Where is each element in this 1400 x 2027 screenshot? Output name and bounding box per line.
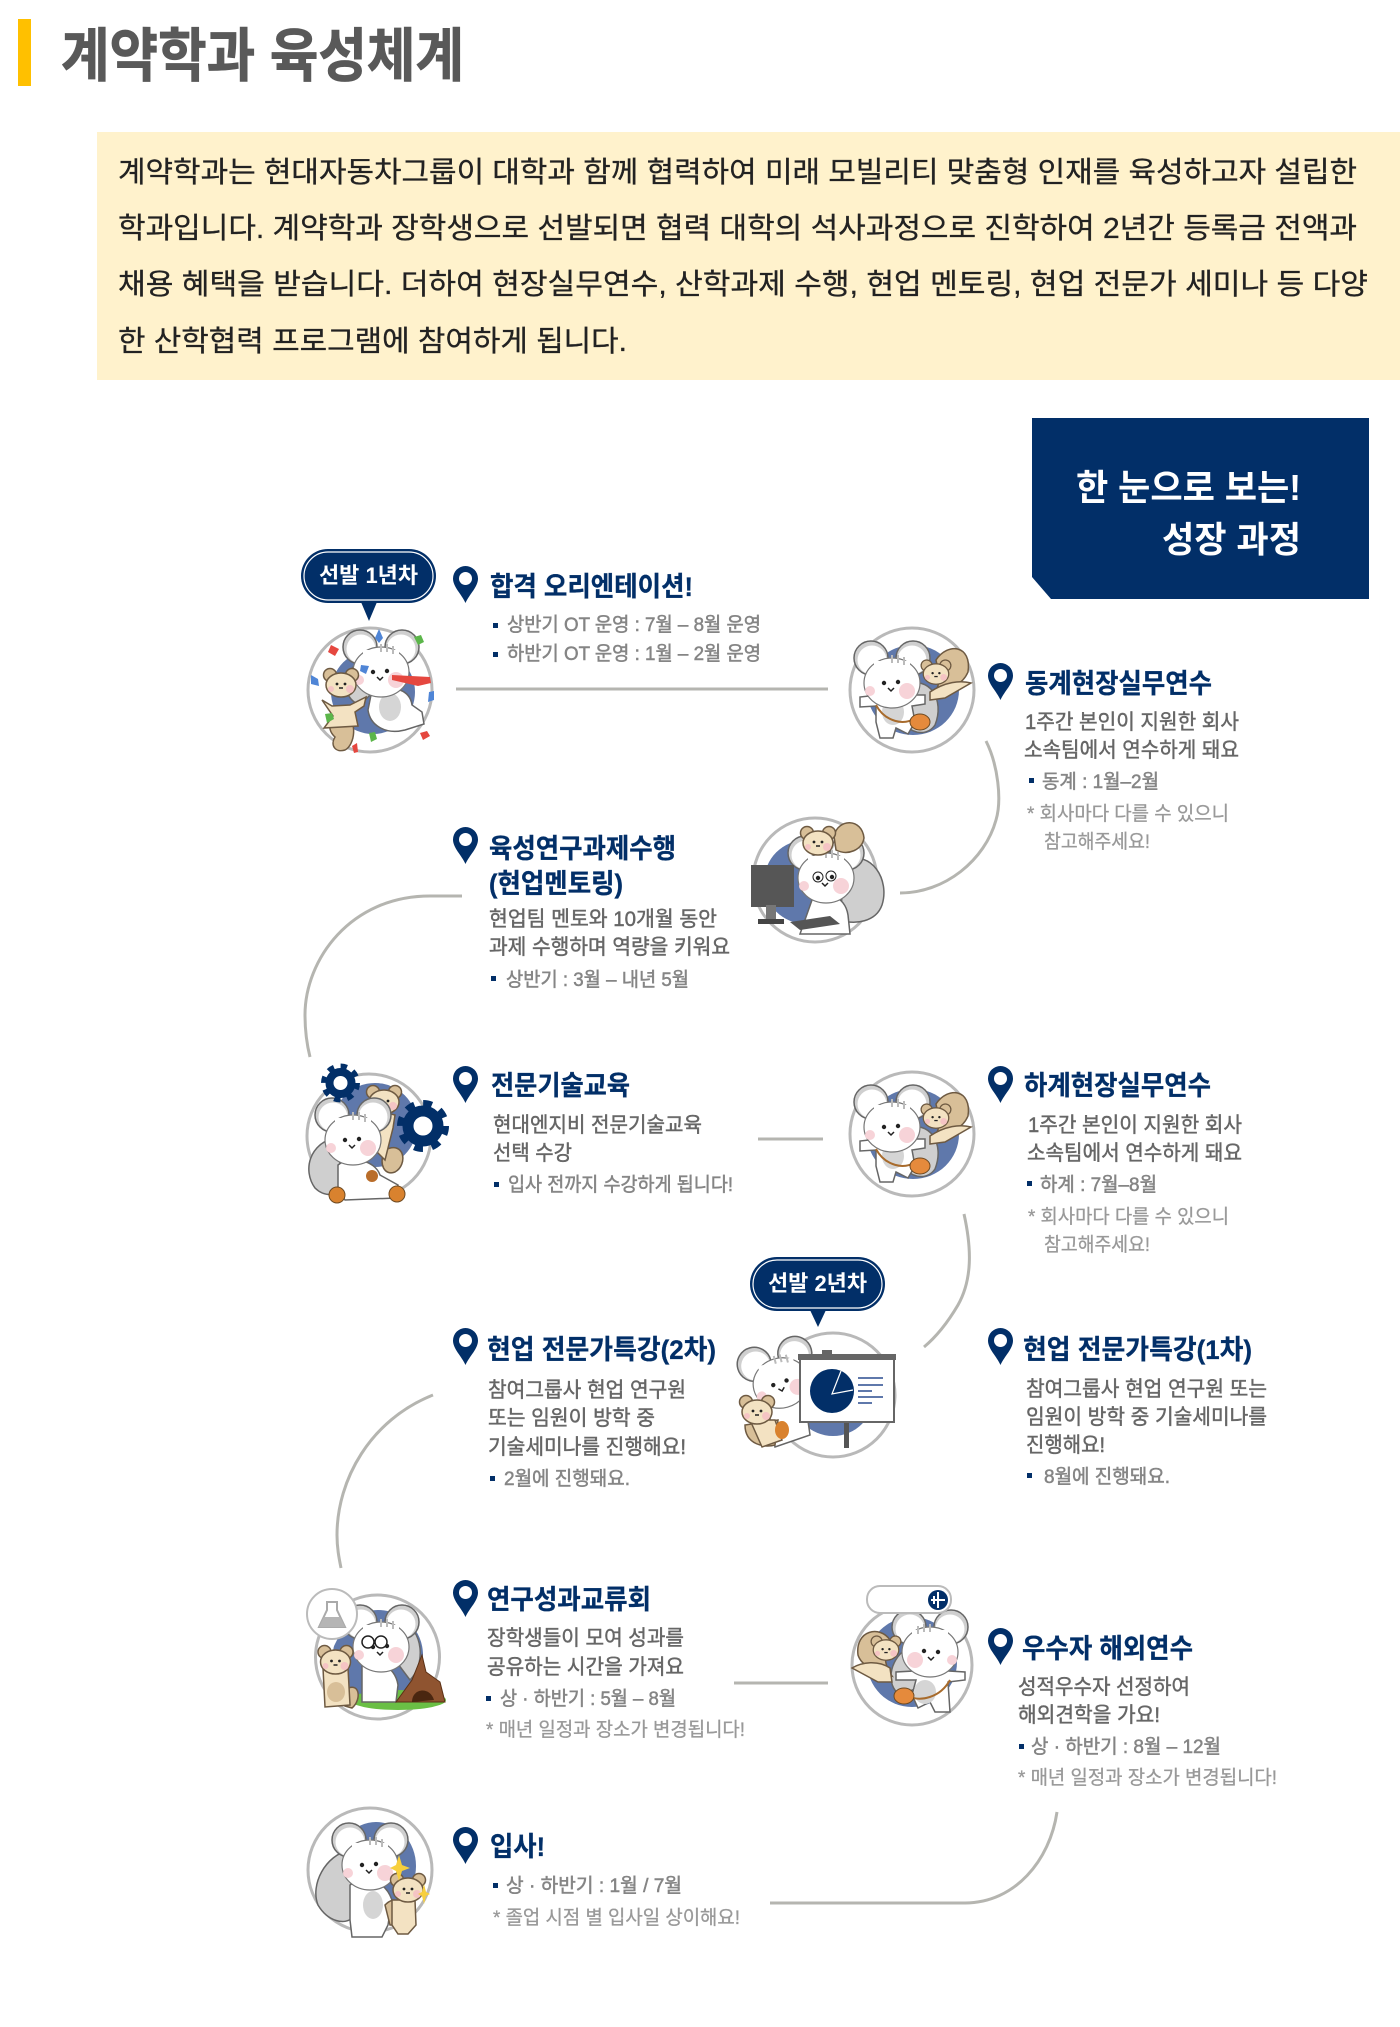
mascot: summer internship (850, 1072, 974, 1196)
mascot: presentation (733, 1333, 896, 1457)
heading: 입사! (490, 1832, 545, 1862)
mascot: celebration (308, 628, 434, 753)
mascot: technical training (307, 1074, 431, 1203)
description: 참고해주세요! (1044, 1234, 1150, 1256)
growth process banner (1032, 418, 1369, 599)
heading: 하계현장실무연수 (1024, 1071, 1211, 1101)
icon: pin (988, 663, 1013, 700)
icon: pin (988, 1628, 1013, 1665)
description: 상반기 : 3월 – 내년 5월 (506, 969, 689, 991)
mascot: overseas training (852, 1605, 972, 1725)
heading: 합격 오리엔테이션! (490, 572, 693, 602)
schedule: 상반기 OT 운영 : 7월 – 8월 운영 (507, 614, 761, 636)
description: * 회사마다 다를 수 있으니 (1028, 1206, 1229, 1228)
description: 2월에 진행돼요. (504, 1468, 630, 1490)
description: 성적우수자 선정하여 (1018, 1676, 1190, 1699)
description: 선택 수강 (493, 1142, 572, 1165)
heading: (현업멘토링) (489, 869, 623, 899)
description (493, 1114, 733, 1196)
heading: 동계현장실무연수 (1025, 669, 1212, 699)
intro panel: 학과입니다. 계약학과 장학생으로 선발되면 협력 대학의 석사과정으로 진학하여 2년간 등록금 전액과 (118, 212, 1357, 245)
description: 진행해요! (1026, 1434, 1105, 1457)
badge: year 2: 선발 2년차 (768, 1271, 867, 1296)
description: 참여그룹사 현업 연구원 (488, 1379, 686, 1402)
description: 현대엔지비 전문기술교육 (493, 1114, 702, 1137)
step: research exchange (453, 1580, 745, 1741)
step: overseas training (988, 1628, 1277, 1789)
description: 입사 전까지 수강하게 됩니다! (508, 1174, 733, 1196)
step: expert lecture 2nd (453, 1328, 716, 1490)
heading: 육성연구과제수행 (489, 834, 676, 864)
description: 1주간 본인이 지원한 회사 (1025, 711, 1239, 734)
step: employment (453, 1827, 740, 1929)
title: 계약학과 육성체계 (61, 24, 464, 89)
step: research project (453, 827, 730, 991)
icon: pin (453, 1580, 478, 1617)
icon: small gear (324, 1066, 358, 1100)
description: 해외견학을 가요! (1018, 1704, 1160, 1727)
description (488, 1379, 686, 1490)
growth process banner: 한 눈으로 보는! (1076, 467, 1301, 508)
step: summer internship (988, 1066, 1242, 1256)
heading (489, 834, 676, 899)
description: 1주간 본인이 지원한 회사 (1028, 1114, 1242, 1137)
description: 상 · 하반기 : 5월 – 8월 (500, 1688, 676, 1710)
description (1024, 711, 1239, 853)
icon: pin (453, 827, 478, 864)
description: 소속팀에서 연수하게 돼요 (1024, 739, 1239, 762)
heading: 현업 전문가특강(1차) (1023, 1335, 1252, 1365)
description: * 매년 일정과 장소가 변경됩니다! (486, 1719, 745, 1741)
description (1027, 1114, 1242, 1256)
schedule: 상 · 하반기 : 1월 / 7월 (506, 1875, 682, 1897)
description: * 매년 일정과 장소가 변경됩니다! (1018, 1767, 1277, 1789)
heading: 연구성과교류회 (487, 1585, 651, 1615)
badge: year 1: 선발 1년차 (319, 563, 418, 588)
description: 임원이 방학 중 기술세미나를 (1026, 1406, 1267, 1429)
title accent bar (18, 19, 31, 86)
schedule (493, 614, 761, 665)
icon: pin (453, 1066, 478, 1103)
heading: 전문기술교육 (491, 1071, 630, 1101)
icon: pin (988, 1328, 1013, 1365)
schedule (493, 1875, 740, 1929)
icon: pin (453, 1328, 478, 1365)
mascot: employment (308, 1808, 432, 1937)
description: 참여그룹사 현업 연구원 또는 (1026, 1378, 1267, 1401)
icon: pin (988, 1066, 1013, 1103)
icon: flask thought bubble (307, 1589, 357, 1650)
description: 또는 임원이 방학 중 (488, 1407, 655, 1430)
description: 공유하는 시간을 가져요 (487, 1656, 684, 1679)
intro panel: 계약학과는 현대자동차그룹이 대학과 함께 협력하여 미래 모빌리티 맞춤형 인재를 육성하고자 설립한 (118, 156, 1357, 189)
description: 과제 수행하며 역량을 키워요 (489, 936, 730, 959)
heading: 현업 전문가특강(2차) (487, 1335, 716, 1365)
description: 소속팀에서 연수하게 돼요 (1027, 1142, 1242, 1165)
heading: 우수자 해외연수 (1022, 1634, 1193, 1664)
icon: pin (453, 566, 478, 603)
step: orientation (453, 566, 761, 665)
description (1018, 1676, 1277, 1789)
growth process banner: 성장 과정 (1162, 519, 1301, 560)
intro panel: 한 산학협력 프로그램에 참여하게 됩니다. (118, 325, 627, 358)
description: 8월에 진행돼요. (1044, 1466, 1170, 1488)
description: 하계 : 7월–8월 (1040, 1174, 1157, 1196)
description: 현업팀 멘토와 10개월 동안 (489, 908, 717, 931)
description: * 회사마다 다를 수 있으니 (1027, 803, 1229, 825)
icon: large gear (400, 1103, 446, 1149)
description: 기술세미나를 진행해요! (488, 1436, 686, 1459)
description (486, 1627, 745, 1741)
description (489, 908, 730, 991)
badge: year 2 (750, 1257, 885, 1327)
description: 장학생들이 모여 성과를 (487, 1627, 684, 1650)
description (1026, 1378, 1267, 1488)
description: 상 · 하반기 : 8월 – 12월 (1031, 1736, 1221, 1758)
schedule: * 졸업 시점 별 입사일 상이해요! (493, 1907, 740, 1929)
step: winter internship (988, 663, 1239, 853)
schedule: 하반기 OT 운영 : 1월 – 2월 운영 (507, 643, 761, 665)
intro panel: 채용 혜택을 받습니다. 더하여 현장실무연수, 산학과제 수행, 현업 멘토링, 현업 전문가 세미나 등 다양 (118, 268, 1368, 301)
mascot: mentoring (751, 818, 884, 942)
step: expert lecture 1st (988, 1328, 1267, 1488)
step: technical training (453, 1066, 733, 1196)
mascot: research exchange (316, 1595, 446, 1719)
icon: pin (453, 1827, 478, 1864)
description: 참고해주세요! (1044, 831, 1150, 853)
badge: year 1 (301, 549, 436, 621)
connector lines (305, 689, 1057, 1903)
intro panel (97, 132, 1400, 380)
mascot: winter internship (850, 628, 974, 752)
icon: airplane boarding pass (867, 1586, 951, 1613)
description: 동계 : 1월–2월 (1042, 771, 1159, 793)
